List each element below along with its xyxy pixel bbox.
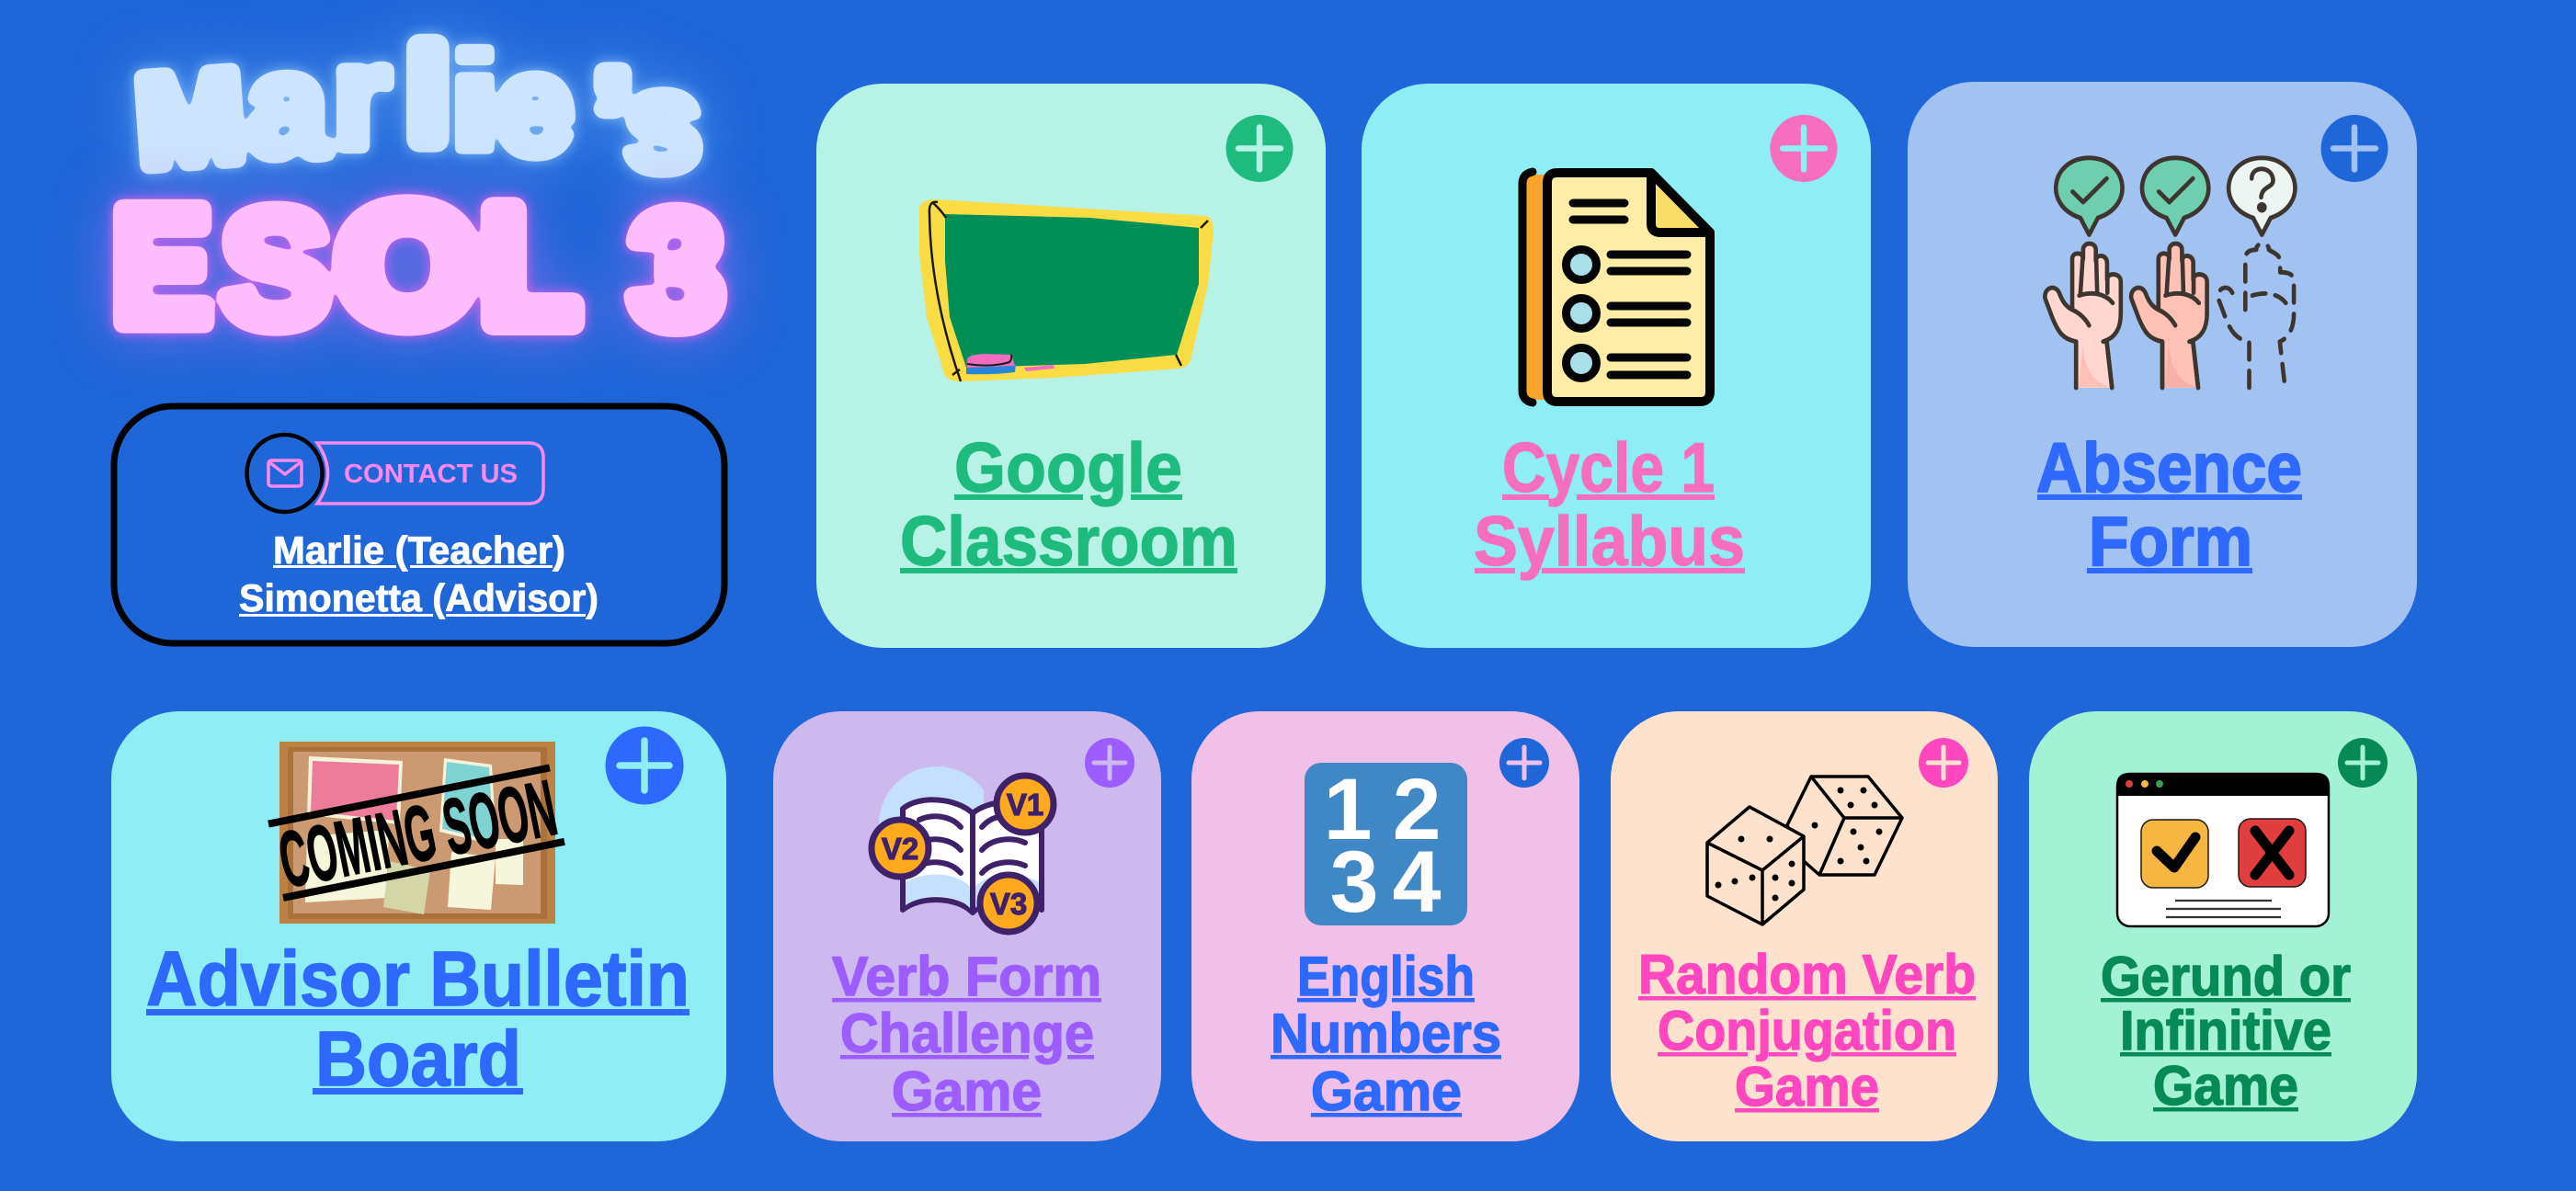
panel: Google Classroom (816, 84, 1326, 648)
icon: plus (1919, 738, 1968, 788)
link label: Form (2089, 503, 2252, 581)
panel: Cycle 1 Syllabus (1362, 84, 1871, 648)
badge V2: V2 (882, 832, 918, 866)
hand two (2131, 244, 2207, 388)
icon: plus (1771, 115, 1837, 182)
link label (146, 936, 690, 1102)
title: Marlie's: ’ (595, 44, 631, 188)
link label (2036, 429, 2302, 581)
link label: English (1297, 946, 1475, 1007)
link label: Gerund or (2101, 946, 2351, 1007)
link label (1271, 946, 1501, 1122)
card background (111, 711, 726, 1141)
contact us button: CONTACT US (344, 459, 518, 489)
speech bubble: check two (2142, 158, 2208, 234)
title: ESOL 3: 3 (629, 177, 724, 362)
title: ESOL 3: E (112, 175, 211, 359)
card background (1908, 82, 2417, 647)
icon: number tile: 2 (1393, 761, 1441, 858)
link label: Advisor Bulletin (146, 936, 690, 1022)
icon: dice (1707, 777, 1902, 924)
coming soon stamp (268, 764, 566, 906)
title: Marlie's: a (246, 22, 329, 187)
link label: Challenge (840, 1003, 1094, 1064)
title: ESOL 3 (112, 174, 724, 362)
icon: plus (1085, 738, 1134, 788)
title: Marlie's: l (410, 23, 446, 167)
icon: chalkboard (922, 202, 1211, 381)
hand three: dashed (2218, 244, 2294, 388)
title: ESOL 3: O (337, 174, 478, 358)
panel: contact (114, 406, 724, 643)
badge V3: V3 (990, 887, 1027, 921)
title: Marlie's: i (445, 22, 505, 181)
title: Marlie's (131, 14, 702, 200)
icon: envelope in circle (246, 435, 322, 512)
panel: Verb Form Challenge Game (773, 711, 1161, 1141)
icon: number tile: 1 (1324, 761, 1372, 858)
card background (1191, 711, 1579, 1141)
link label: Cycle 1 (1502, 429, 1715, 507)
icon: raised hands with speech bubbles (2045, 158, 2295, 388)
link label: Game (1311, 1061, 1462, 1122)
icon: open book with verb badges (872, 766, 1054, 932)
link label: Board (315, 1015, 521, 1102)
card background (2029, 711, 2417, 1141)
icon: number tile: 3 (1330, 834, 1378, 931)
card background (1611, 711, 1998, 1141)
icon: number tile: 4 (1393, 834, 1442, 931)
icon: plus (2338, 738, 2388, 788)
title: ESOL 3: L (482, 175, 578, 359)
link label (832, 946, 1101, 1122)
coming soon stamp: COMING SOON (272, 764, 564, 905)
front die (1707, 807, 1804, 924)
badge V3 (980, 875, 1037, 932)
link label: Verb Form (832, 946, 1101, 1007)
contact box outline (114, 406, 724, 643)
link label: Game (1735, 1056, 1879, 1117)
speech bubble: question (2228, 158, 2295, 234)
icon: number tile (1305, 761, 1467, 931)
link label: Numbers (1271, 1003, 1501, 1064)
hand one (2045, 244, 2121, 388)
panel: English Numbers Game (1191, 711, 1579, 1141)
link label: Infinitive (2120, 1000, 2331, 1061)
speech bubble: check one (2056, 158, 2123, 234)
panel: Random Verb Conjugation Game (1611, 711, 1998, 1141)
link label (1638, 944, 1976, 1117)
link label: Conjugation (1658, 1000, 1956, 1061)
card background (1362, 84, 1871, 648)
contact link: Simonetta: Simonetta (Advisor) (239, 576, 598, 619)
panel: Advisor Bulletin Board (111, 711, 726, 1141)
contact link: Marlie: Marlie (Teacher) (273, 528, 565, 572)
link label: Game (2153, 1055, 2298, 1117)
badge V2 (872, 820, 929, 877)
panel: Gerund or Infinitive Game (2029, 711, 2417, 1141)
icon: plus (2320, 115, 2388, 182)
back die (1787, 777, 1902, 875)
title: Marlie's: M (131, 42, 248, 194)
icon: plus (605, 726, 684, 805)
title: Marlie's: s (623, 41, 702, 200)
title: ESOL 3: S (221, 176, 331, 361)
icon: bulletin board with coming soon stamp (268, 742, 566, 924)
link label: Absence (2036, 429, 2302, 507)
link label: Game (892, 1061, 1042, 1122)
icon: syllabus document (1522, 172, 1710, 403)
panel: Absence Form (1908, 82, 2417, 647)
title: Marlie's: r (333, 14, 390, 178)
badge V1: V1 (1007, 788, 1043, 822)
contact us button (317, 443, 543, 504)
link label (900, 429, 1237, 581)
link label (1474, 429, 1745, 581)
icon: quiz window (2116, 773, 2330, 926)
link label (2101, 946, 2351, 1117)
icon: plus (1226, 115, 1293, 182)
link label: Google (954, 429, 1182, 507)
icon: plus (1499, 738, 1549, 788)
card background (816, 84, 1326, 648)
card background (773, 711, 1161, 1141)
link label: Syllabus (1474, 503, 1745, 581)
badge V1 (997, 776, 1054, 833)
title: Marlie's: e (495, 25, 574, 184)
link label: Classroom (900, 503, 1237, 581)
link label: Random Verb (1638, 944, 1976, 1005)
